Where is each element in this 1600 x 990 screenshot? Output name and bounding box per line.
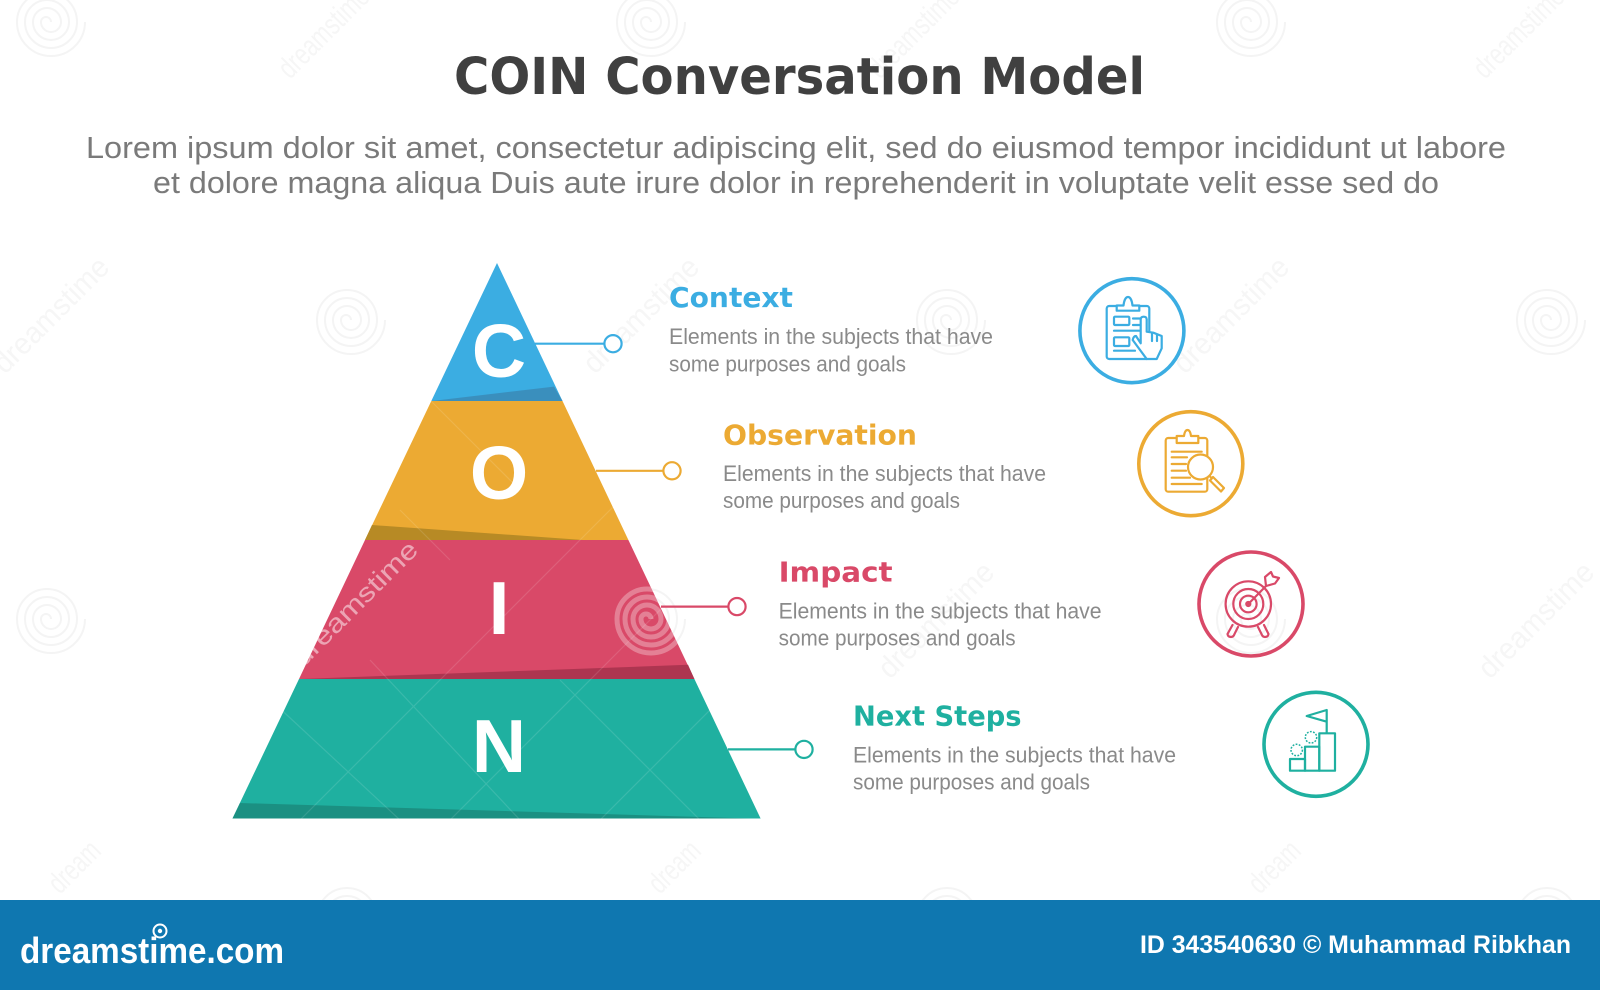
tier C: context [431, 263, 562, 401]
icon: clipboard with hand [1080, 279, 1184, 383]
text: dreamstime [872, 556, 1001, 685]
text block: context: some purposes and goals [669, 352, 906, 376]
text: dreamstime [577, 251, 706, 380]
subtitle text block: Lorem ipsum dolor sit amet, consectetur adipiscing elit, sed do eiusmod tempor incididunt ut labore [86, 130, 1506, 165]
text: dreamstime [1167, 251, 1296, 380]
icon: steps with flag [1264, 692, 1368, 796]
text block: observation: some purposes and goals [723, 488, 960, 513]
footer band [0, 900, 1600, 990]
text block: observation: Observation [723, 418, 917, 452]
icon: clipboard with magnifier [1139, 412, 1243, 516]
connector: next steps [728, 741, 813, 758]
tier I: impact: I [489, 566, 509, 650]
tier N: next steps [232, 679, 761, 818]
text block: next steps: Next Steps [853, 699, 1022, 732]
text block: impact: some purposes and goals [779, 626, 1016, 650]
pyramid chart: dreamstime [286, 534, 424, 672]
text block: next steps: Elements in the subjects that have [853, 742, 1176, 767]
text block: observation [723, 418, 1046, 513]
tier C: context: C [472, 309, 526, 393]
text block: impact: Elements in the subjects that have [779, 598, 1102, 624]
text block: context [669, 281, 993, 376]
text: dream [1242, 834, 1307, 900]
connector: context [535, 335, 622, 352]
footer logo: dreamstime.com [20, 930, 284, 971]
pyramid chart [232, 263, 761, 820]
subtitle text block [86, 130, 1506, 200]
tier O: observation [365, 401, 628, 540]
text: dream [42, 834, 107, 900]
text block: observation: Elements in the subjects that have [723, 461, 1046, 486]
footer credit: ID 343540630 © Muhammad Ribkhan [1140, 931, 1571, 959]
connector: impact [661, 598, 746, 615]
text block: next steps: some purposes and goals [853, 769, 1090, 794]
title: COIN Conversation Model [454, 48, 1145, 107]
tier I: impact [299, 540, 694, 679]
connector: observation [596, 462, 681, 479]
tier N: next steps: N [472, 704, 526, 788]
text block: context: Elements in the subjects that have [669, 324, 993, 349]
text block: impact: Impact [779, 556, 893, 588]
text block: context: Context [669, 281, 793, 314]
text block: impact [779, 556, 1102, 650]
subtitle text block: et dolore magna aliqua Duis aute irure dolor in reprehenderit in voluptate velit esse sed do [153, 165, 1439, 200]
text: dream [642, 834, 707, 900]
tier O: observation: O [470, 431, 528, 515]
icon: target with arrow [1199, 552, 1303, 656]
text block: next steps [853, 699, 1176, 794]
